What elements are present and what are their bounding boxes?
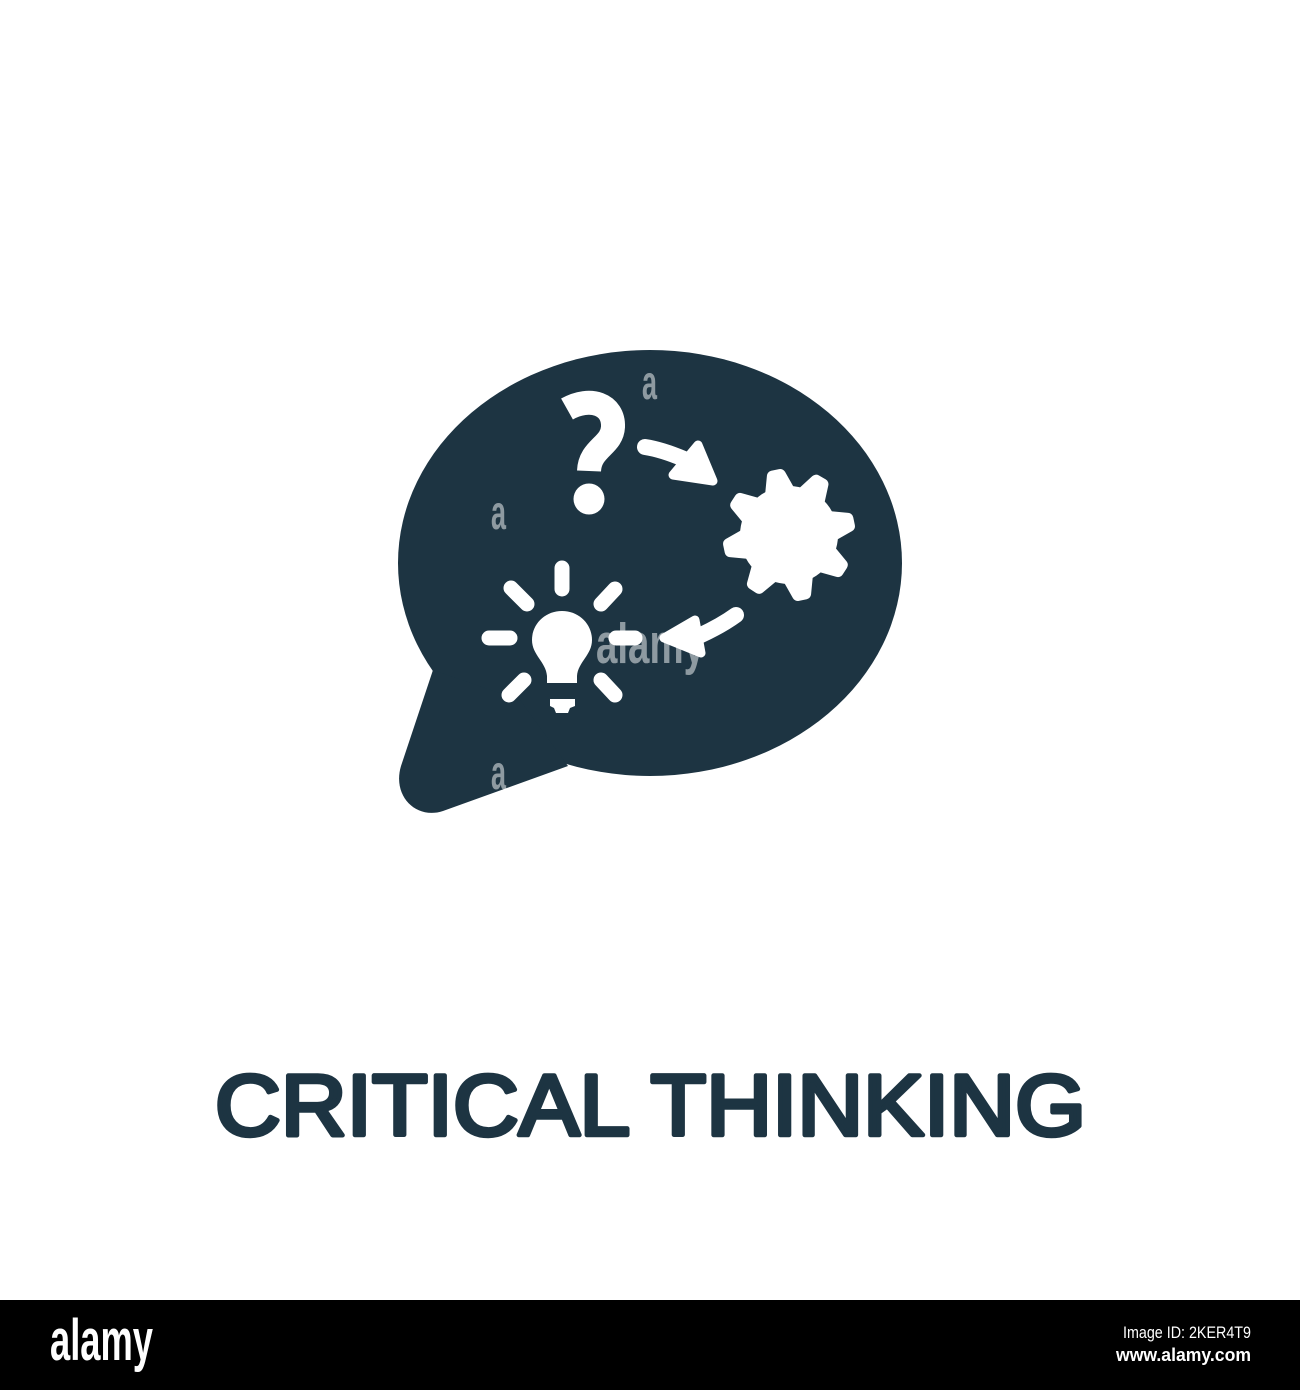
watermarks: a [491, 487, 506, 540]
icon: question mark [567, 403, 613, 514]
image id: Image ID: 2KER4T9 [1123, 1323, 1251, 1342]
website: www.alamy.com [1115, 1345, 1251, 1365]
title: CRITICAL THINKING [215, 1058, 1086, 1154]
watermarks: alamy [596, 612, 705, 676]
arrow: question to gear [645, 445, 713, 481]
watermarks [491, 357, 705, 800]
arrow: gear to light bulb [664, 615, 736, 653]
footer bar [0, 1300, 1300, 1390]
footer logo: alamy [50, 1308, 153, 1373]
icon: critical thinking speech bubble [398, 350, 902, 813]
speech bubble body with tail [398, 350, 902, 813]
watermarks: a [491, 747, 506, 800]
watermarks: a [642, 357, 657, 410]
icon: gear [727, 473, 851, 597]
icon: light bulb with rays [489, 568, 635, 713]
